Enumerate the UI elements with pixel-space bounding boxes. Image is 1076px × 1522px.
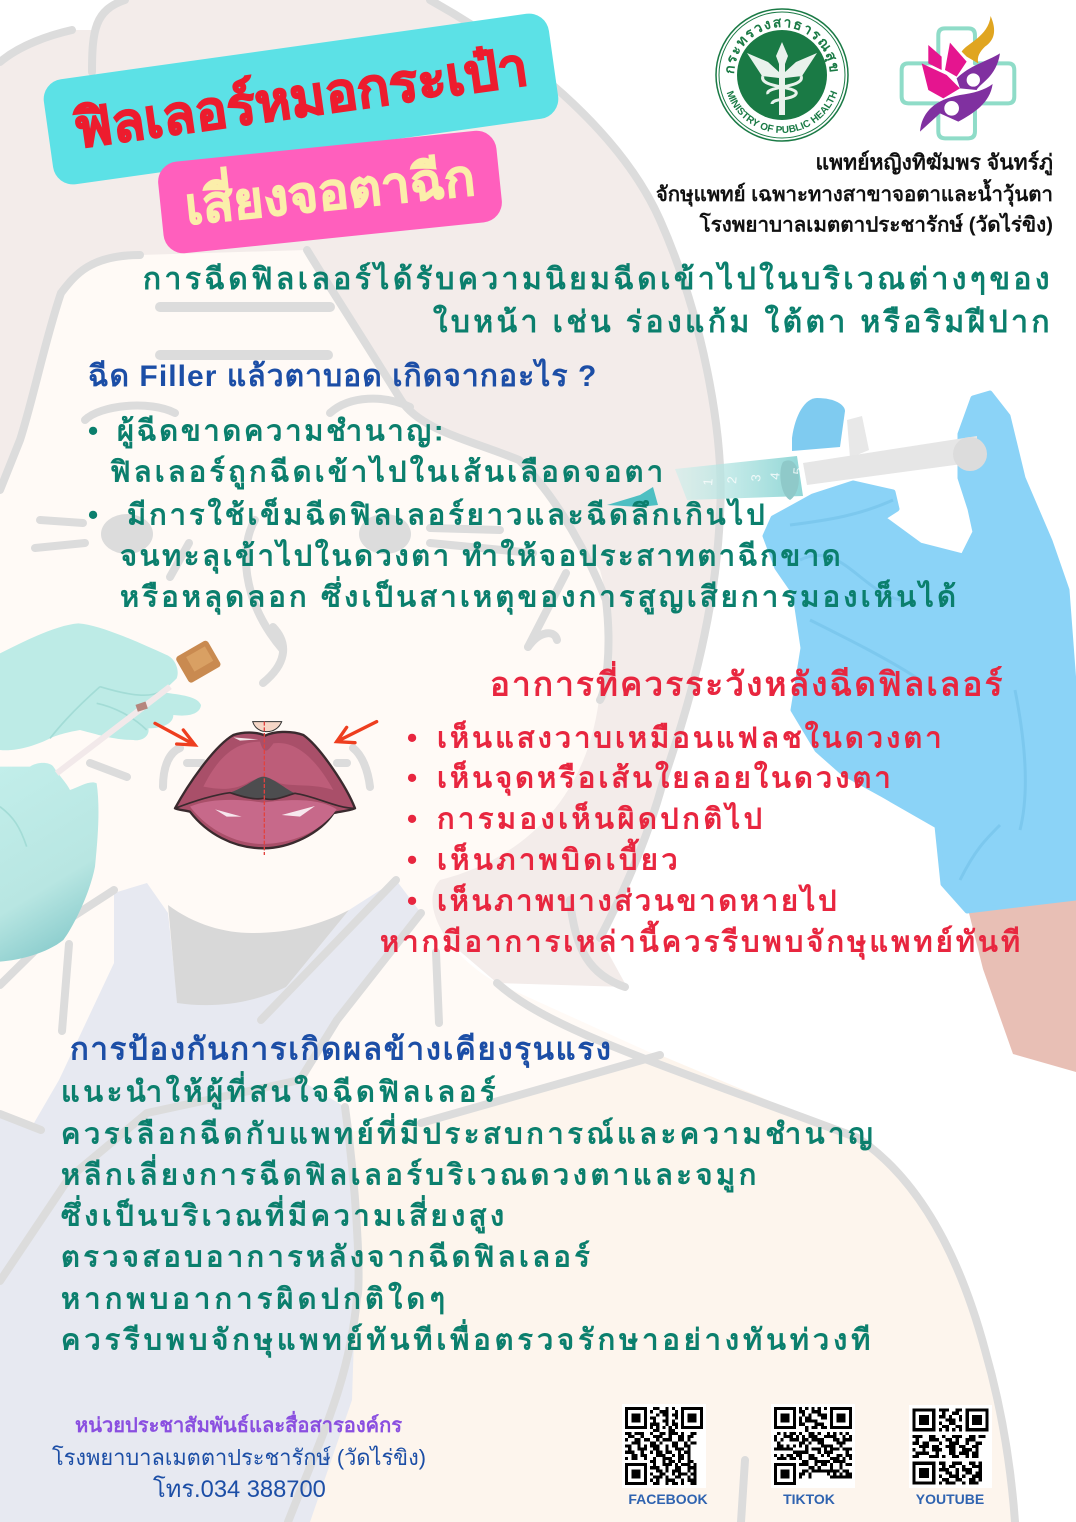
bullet list: symptoms: เห็นภาพบางส่วนขาดหายไป xyxy=(437,886,839,918)
footer: contact unit: โรงพยาบาลเมตตาประชารักษ์ (วัดไร่ขิง) xyxy=(52,1445,426,1470)
footer: contact unit: หน่วยประชาสัมพันธ์และสื่อสารองค์กร xyxy=(75,1415,402,1437)
icon: right gloved hand with syringe: 5 xyxy=(790,467,806,475)
bullet list: symptoms: การมองเห็นผิดปกติไป xyxy=(437,804,766,836)
logo: Ministry of Public Health: MINISTRY OF PUBLIC HEALTH xyxy=(726,90,838,133)
text block: prevention advice: ควรรีบพบจักษุแพทย์ทันทีเพื่อตรวจรักษาอย่างทันท่วงที xyxy=(61,1324,874,1356)
bullet list: causes: • xyxy=(88,500,101,532)
callout: see ophthalmologist: หากมีอาการเหล่านี้ควรรีบพบจักษุแพทย์ทันที xyxy=(380,926,1023,958)
bullet list: symptoms: เห็นภาพบิดเบี้ยว xyxy=(437,844,681,876)
icon: right gloved hand with syringe: 2 xyxy=(724,476,740,484)
heading: cause of blindness: ฉีด Filler แล้วตาบอด เกิดจากอะไร ? xyxy=(88,360,597,393)
heading: prevention: การป้องกันการเกิดผลข้างเคียงรุนแรง xyxy=(70,1032,613,1066)
bullet list: symptoms xyxy=(407,720,945,918)
bullet list: symptoms: • xyxy=(407,886,420,918)
bullet list: causes: จนทะลุเข้าไปในดวงตา ทำให้จอประสาทตาฉีกขาด xyxy=(120,540,843,572)
logo: Ministry of Public Health xyxy=(715,8,849,142)
label: YouTube: YOUTUBE xyxy=(916,1491,984,1507)
label: Facebook: FACEBOOK xyxy=(628,1491,708,1507)
credit: doctor name: แพทย์หญิงทิฆัมพร จันทร์ภู่ xyxy=(816,151,1053,174)
bullet list: symptoms: • xyxy=(407,844,420,876)
bullet list: symptoms: • xyxy=(407,722,420,754)
bullet list: causes: ผู้ฉีดขาดความชำนาญ: xyxy=(117,416,446,448)
bullet list: symptoms: เห็นจุดหรือเส้นใยลอยในดวงตา xyxy=(437,762,894,794)
subtitle: retina tear risk: เสี่ยงจอตาฉีก xyxy=(182,149,478,235)
text block: prevention advice: ซึ่งเป็นบริเวณที่มีความเสี่ยงสูง xyxy=(61,1200,508,1232)
bullet list: symptoms: • xyxy=(407,804,420,836)
footer: contact unit xyxy=(52,1410,426,1503)
QR code: Facebook xyxy=(622,1404,706,1488)
illustration: lips with arrows xyxy=(153,720,378,855)
label: TikTok: TIKTOK xyxy=(783,1491,835,1507)
text block: prevention advice: หลีกเลี่ยงการฉีดฟิลเลอร์บริเวณดวงตาและจมูก xyxy=(61,1160,760,1192)
text block: prevention advice xyxy=(61,1071,876,1358)
bullet list: causes: ฟิลเลอร์ถูกฉีดเข้าไปในเส้นเลือดจอตา xyxy=(110,456,666,488)
heading: warning symptoms: อาการที่ควรระวังหลังฉีดฟิลเลอร์ xyxy=(490,666,1005,702)
credit: hospital: โรงพยาบาลเมตตาประชารักษ์ (วัดไร่ขิง) xyxy=(700,214,1053,237)
panel: subtitle banner pink xyxy=(156,129,504,255)
bullet list: causes: • xyxy=(88,416,101,448)
icon: right gloved hand with syringe: 4 xyxy=(767,472,783,480)
footer: contact unit: โทร.034 388700 xyxy=(153,1477,326,1503)
intro text: การฉีดฟิลเลอร์ได้รับความนิยมฉีดเข้าไปในบริเวณต่างๆของ xyxy=(143,263,1053,296)
panel: title banner cyan xyxy=(41,11,561,187)
intro text xyxy=(143,261,1053,339)
text block: prevention advice: ควรเลือกฉีดกับแพทย์ที่มีประสบการณ์และความชำนาญ xyxy=(61,1118,876,1150)
bullet list: causes: หรือหลุดลอก ซึ่งเป็นสาเหตุของการสูญเสียการมองเห็นได้ xyxy=(120,582,959,614)
intro text: ใบหน้า เช่น ร่องแก้ม ใต้ตา หรือริมฝีปาก xyxy=(433,306,1053,339)
credit: specialty: จักษุแพทย์ เฉพาะทางสาขาจอตาและน้ำวุ้นตา xyxy=(656,184,1053,206)
logo: Ministry of Public Health: กระทรวงสาธารณสุข xyxy=(726,18,838,74)
bullet list: symptoms: • xyxy=(407,762,420,794)
icon: right gloved hand with syringe: 1 xyxy=(700,478,716,486)
bullet list: causes: มีการใช้เข็มฉีดฟิลเลอร์ยาวและฉีดลึกเกินไป xyxy=(127,500,768,532)
bullet list: causes xyxy=(88,415,959,615)
QR code: TikTok xyxy=(771,1404,855,1488)
logo: hospital lotus cross xyxy=(900,16,1016,140)
QR code: YouTube xyxy=(909,1405,992,1488)
bullet list: symptoms: เห็นแสงวาบเหมือนแฟลชในดวงตา xyxy=(437,722,945,754)
text block: prevention advice: หากพบอาการผิดปกติใดๆ xyxy=(61,1284,449,1316)
illustration: left gloved hands with syringe and vial xyxy=(0,623,220,962)
text block: prevention advice: ตรวจสอบอาการหลังจากฉีดฟิลเลอร์ xyxy=(61,1242,593,1274)
icon: right gloved hand with syringe: 3 xyxy=(748,474,764,482)
title: filler: ฟิลเลอร์หมอกระเป๋า xyxy=(70,38,532,160)
text block: prevention advice: แนะนำให้ผู้ที่สนใจฉีดฟิลเลอร์ xyxy=(61,1076,499,1108)
